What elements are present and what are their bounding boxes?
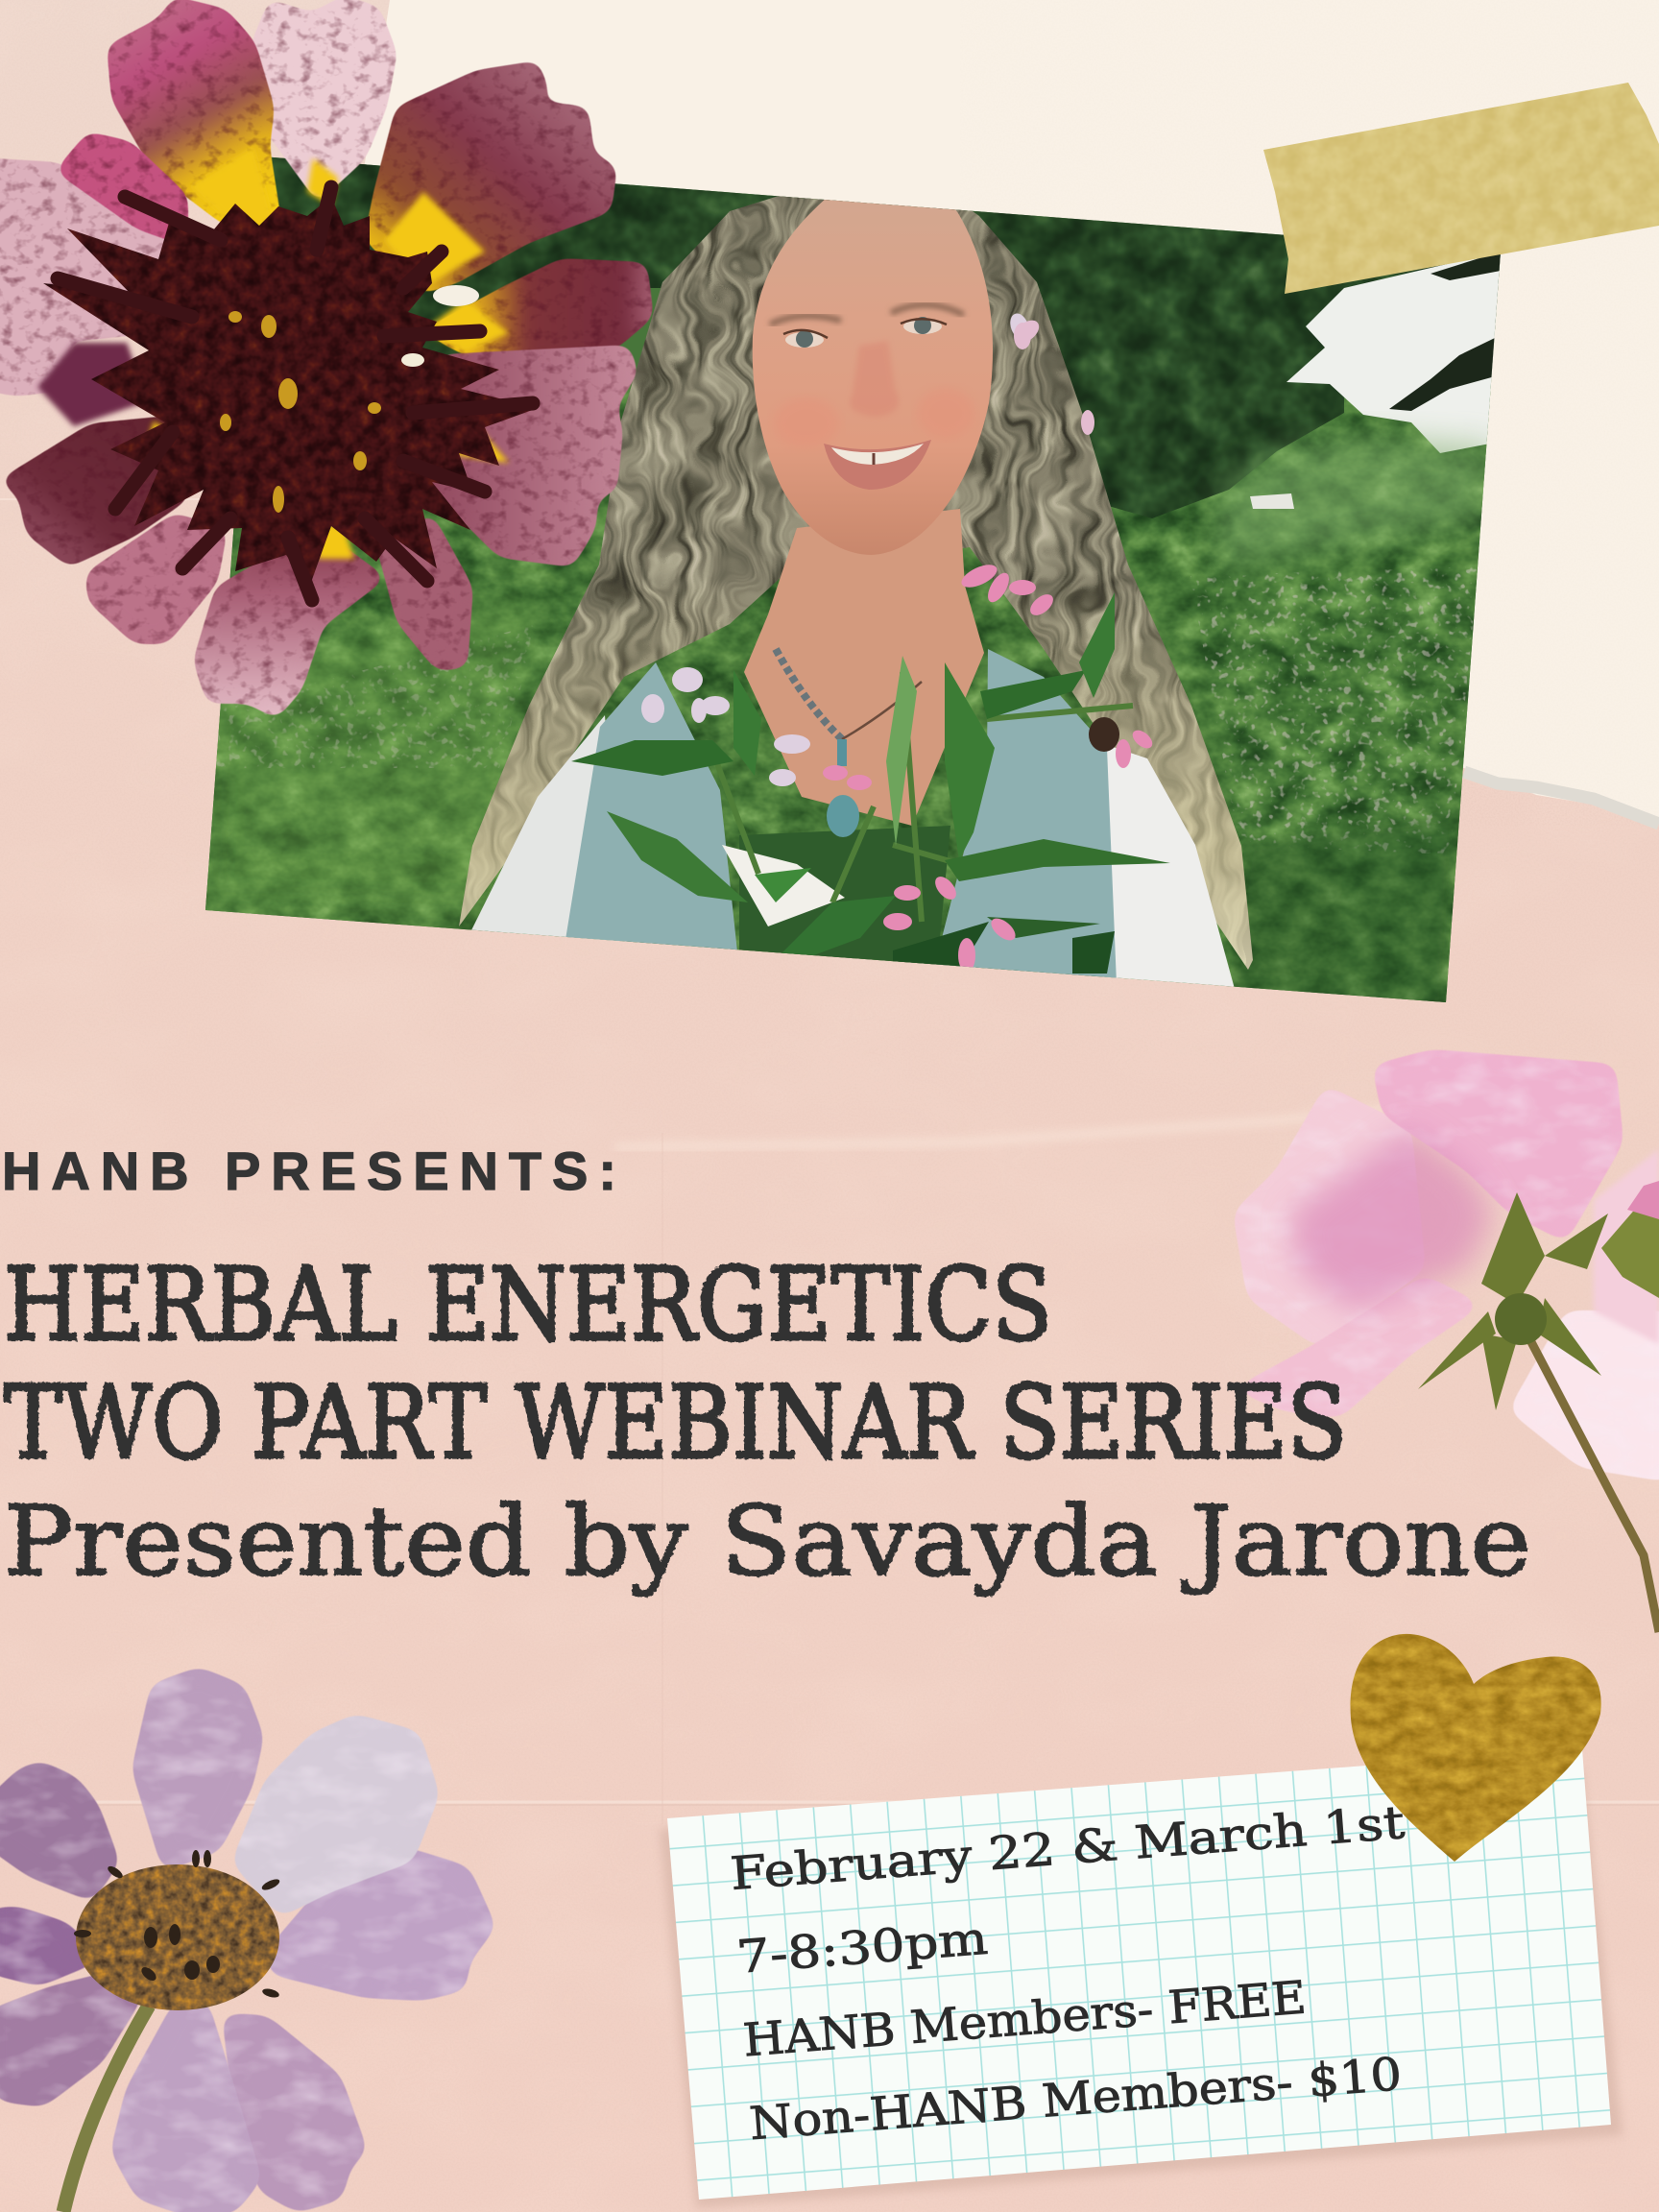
cosmos petal: lower left — [0, 1966, 142, 2106]
pressed flower: pink rose — [1234, 1050, 1659, 1632]
date line: February 22 & March 1st — [729, 1796, 1407, 1901]
non-members price line: Non-HANB Members- $10 — [748, 2048, 1404, 2151]
cosmos golden centre — [76, 1864, 279, 2010]
white top and dark leaves at centre — [722, 826, 950, 979]
cosmos stem — [63, 2006, 149, 2212]
ragged florets — [58, 187, 533, 600]
petal: pale top — [252, 0, 397, 202]
seed specks — [220, 285, 479, 513]
petal: right lower — [403, 346, 637, 566]
petal: left dark — [0, 415, 187, 566]
rose petal: right lower — [1509, 1311, 1659, 1481]
petal: magenta top left — [108, 0, 284, 245]
rose sepals and bud — [1418, 1181, 1659, 1410]
title: Two Part Webinar Series: TWO PART WEBINAR SERIES — [4, 1364, 1347, 1481]
petal: bottom — [194, 528, 386, 718]
cosmos petal: right — [269, 1848, 495, 2000]
comfrey flower clusters — [641, 311, 1156, 973]
hair — [459, 190, 1253, 970]
face — [753, 192, 993, 555]
grid paper note — [660, 1749, 1623, 2208]
chest and neck — [744, 509, 984, 826]
time line: 7-8:30pm — [734, 1912, 990, 1984]
rose petal: upper right — [1373, 1050, 1623, 1241]
rose deep pink centre — [1291, 1128, 1495, 1311]
washi tape — [1263, 83, 1659, 294]
petal: purple fold — [37, 343, 148, 426]
rose petal: lower left — [1234, 1276, 1481, 1417]
rose petal: right upper — [1594, 1149, 1659, 1344]
cosmos stamens — [74, 1850, 281, 1999]
cosmos petal: large white — [232, 1715, 439, 1916]
petal: dark top right — [365, 61, 616, 293]
photo foliage background — [192, 144, 1517, 1018]
comfrey leaves and stems — [571, 592, 1170, 974]
members price line: HANB Members- FREE — [741, 1972, 1309, 2067]
petal: bottom right — [376, 515, 472, 670]
gold heart — [1351, 1634, 1601, 1862]
petal: magenta small — [56, 132, 187, 246]
cream torn paper — [346, 0, 1659, 826]
petal: bottom left — [86, 514, 227, 643]
cosmos petal: bottom — [111, 2002, 261, 2212]
title: Herbal Energetics: HERBAL ENERGETICS — [4, 1246, 1052, 1363]
cosmos petal: lower right — [223, 2014, 367, 2212]
cosmos petal: upper left — [0, 1762, 119, 1901]
photo: woman holding comfrey in a garden — [192, 144, 1517, 1018]
rose petal: back left pale — [1234, 1086, 1425, 1347]
heading: HANB presents: HANB PRESENTS: — [2, 1141, 616, 1201]
note text — [729, 1796, 1426, 2151]
yellow petal bases — [144, 147, 509, 559]
petal: pale left — [0, 158, 182, 396]
cosmos petal: left — [0, 1907, 100, 1985]
pressed flower: maroon and yellow coreopsis — [0, 0, 653, 718]
pressed flower: lilac cosmos — [0, 1668, 495, 2212]
blue scarf vest — [565, 649, 1117, 984]
petal: right — [422, 259, 653, 355]
dark flower centre — [43, 197, 538, 588]
rose stem — [1530, 1340, 1659, 1632]
white shirt — [469, 715, 1235, 989]
subtitle: presenter: Presented by Savayda Jarone — [4, 1485, 1531, 1598]
necklace with pendant — [776, 649, 922, 837]
cosmos petal: top — [132, 1668, 263, 1870]
